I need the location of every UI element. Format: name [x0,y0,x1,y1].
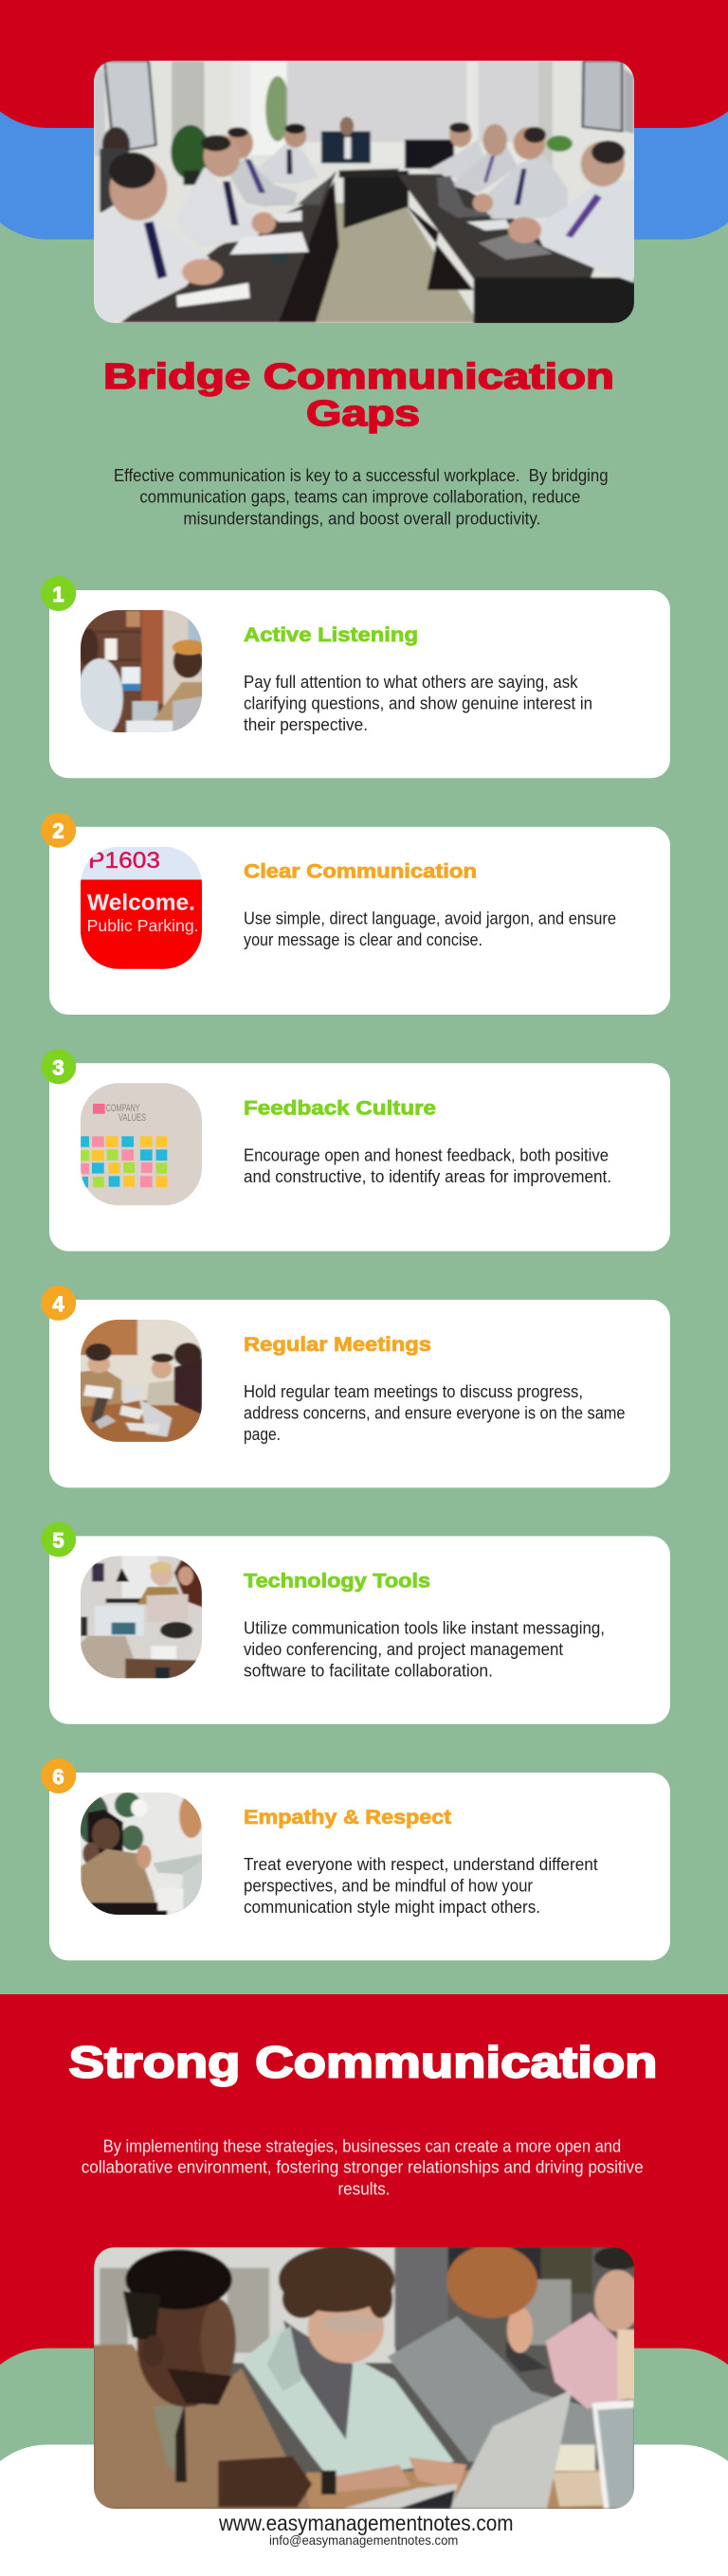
footer email: info@easymanagementnotes.com [269,2532,458,2548]
panel: card 6 empathy and respect [41,1758,670,1960]
heading: Clear Communication [244,860,477,883]
badge 2: 2 [52,820,64,843]
description [244,1145,611,1186]
header shape: blue band [0,0,728,240]
thumbnail: public parking sign: Welcome. [87,891,195,916]
badge 1 [41,576,76,611]
photo: team meeting around tables [88,58,641,326]
photo: colleagues working at a laptop [88,2243,641,2513]
card background [49,827,670,1015]
card background [49,590,670,778]
intro text: communication gaps, teams can improve collaboration, reduce [139,487,580,506]
footer shape: white band [0,2444,728,2576]
footer shape: green band [0,2348,728,2576]
badge 3 [41,1049,76,1084]
badge 5 [41,1522,76,1557]
description: address concerns, and ensure everyone is on the same [244,1403,626,1422]
card background [49,1063,670,1252]
heading: Feedback Culture [244,1096,436,1119]
thumbnail: sticky notes on wall: VALUES [118,1112,146,1124]
card background [49,1773,670,1960]
intro text [114,466,609,528]
badge 4: 4 [52,1292,64,1316]
thumbnail: listener at cafe counter [81,610,202,732]
thumbnail: public parking sign: P1603 [88,848,160,874]
closing text: By implementing these strategies, businesses can create a more open and [103,2135,621,2156]
heading: Technology Tools [244,1569,430,1592]
title: Bridge Communication [103,357,614,397]
description: your message is clear and concise. [244,930,482,949]
thumbnail: colleagues at laptops [79,1556,205,1680]
description: their perspective. [244,715,368,734]
title [103,357,614,434]
badge 2 [41,813,76,848]
description: Pay full attention to what others are saying, ask [244,673,579,692]
closing text: results. [337,2178,391,2198]
description: Utilize communication tools like instant messaging, [244,1618,605,1637]
panel: card 3 feedback culture [41,1049,670,1252]
description: clarifying questions, and show genuine interest in [244,694,592,712]
intro text: misunderstandings, and boost overall productivity. [183,509,540,528]
intro text: Effective communication is key to a successful workplace. By bridging [114,466,609,485]
footer website url: www.easymanagementnotes.com [218,2511,514,2535]
panel: card 1 active listening [41,576,670,778]
card background [49,1300,670,1487]
thumbnail: public parking sign [81,846,202,970]
panel: card 5 technology tools [41,1522,670,1724]
panel: card 4 regular meetings [41,1286,670,1487]
title: Gaps [306,394,420,434]
description: Treat everyone with respect, understand different [244,1855,598,1874]
thumbnail: team around a table [79,1319,205,1443]
heading: Active Listening [244,623,418,646]
badge 3: 3 [52,1055,64,1079]
panel: closing red section [0,1994,728,2576]
badge 1: 1 [52,583,64,606]
heading: Regular Meetings [244,1333,431,1356]
description: Hold regular team meetings to discuss progress, [244,1382,583,1401]
card background [49,1536,670,1724]
heading: Empathy & Respect [244,1806,451,1828]
description [244,910,616,949]
description: Use simple, direct language, avoid jargon, and ensure [244,910,616,928]
panel: card 2 clear communication [41,813,670,1015]
thumbnail: comforting a colleague [77,1792,205,1916]
header shape: red band [0,0,728,128]
description: Encourage open and honest feedback, both positive [244,1145,609,1164]
description [244,1382,626,1444]
closing heading: Strong Communication [68,2037,658,2086]
description [244,673,592,734]
closing text [82,2135,644,2198]
description: page. [244,1425,281,1444]
description [244,1855,598,1917]
description [244,1618,605,1680]
badge 5: 5 [52,1528,64,1552]
description: video conferencing, and project management [244,1640,563,1659]
description: communication style might impact others. [244,1898,540,1917]
badge 4 [41,1286,76,1321]
badge 6 [41,1758,76,1793]
thumbnail: public parking sign: Public Parking. [87,916,199,935]
closing text: collaborative environment, fostering stronger relationships and driving positive [82,2157,644,2177]
description: perspectives, and be mindful of how your [244,1876,533,1895]
description: and constructive, to identify areas for improvement. [244,1167,611,1186]
badge 6: 6 [52,1765,64,1789]
thumbnail: sticky notes on wall: COMPANY [106,1103,140,1114]
description: software to facilitate collaboration. [244,1661,493,1680]
thumbnail: sticky notes on wall [81,1083,202,1206]
